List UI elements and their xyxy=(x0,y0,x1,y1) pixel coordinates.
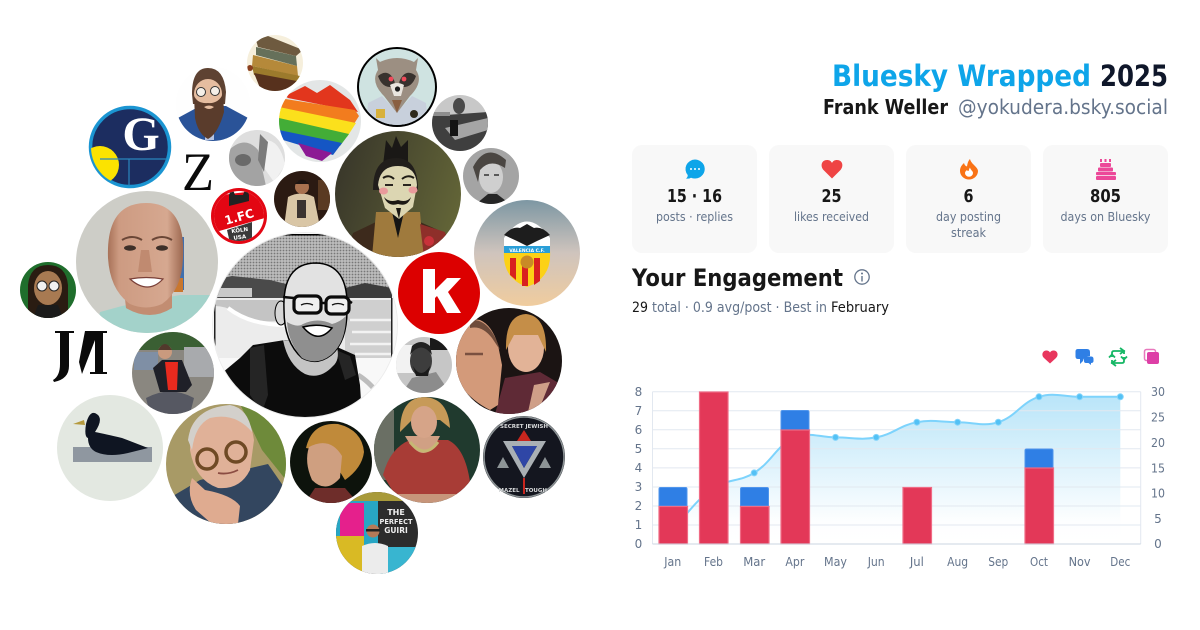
month labels: May xyxy=(824,555,847,569)
month labels: Apr xyxy=(785,555,804,569)
icon: info xyxy=(855,270,869,284)
icon: likes xyxy=(1042,350,1058,364)
icon: cake xyxy=(1096,159,1116,180)
avatar: two men, one clapping xyxy=(456,308,562,414)
left axis labels: 6 xyxy=(635,423,642,437)
avatar: Guardian logo: G xyxy=(122,108,160,161)
icon: reposts xyxy=(1109,348,1127,366)
heading: Your Engagement: Your Engagement xyxy=(631,264,843,292)
left axis labels: 3 xyxy=(635,480,642,494)
icon: heart xyxy=(822,160,842,178)
avatar cluster xyxy=(20,35,580,576)
stat card: likes received: likes received xyxy=(794,210,869,224)
stat card: days on Bluesky: 805 xyxy=(1090,186,1121,207)
icon: quotes xyxy=(1144,350,1159,364)
x axis line xyxy=(652,543,1141,545)
stat card: day posting streak xyxy=(906,145,1031,253)
avatar: Secret Jewish Space Laser Corps patch: SECRET JEWISH xyxy=(500,424,548,430)
month labels: Oct xyxy=(1030,555,1048,569)
avatar: comic-style main portrait xyxy=(212,232,398,418)
avatar: rainbow heart xyxy=(279,80,361,162)
avatar: blond man in suit xyxy=(463,148,519,204)
icon: flame xyxy=(960,159,978,180)
right axis labels: 5 xyxy=(1154,512,1162,526)
avatar: bearded cartoon man xyxy=(176,67,250,141)
bars: likes xyxy=(659,392,1054,544)
engagement summary: total · 0.9 avg/post · Best in xyxy=(652,300,827,316)
line points xyxy=(751,394,1123,476)
month labels: Mar xyxy=(743,555,765,569)
left axis labels xyxy=(635,385,642,551)
stat card: posts and replies: 15 · 16 xyxy=(667,186,722,207)
right axis labels: 25 xyxy=(1151,410,1165,424)
month labels: Feb xyxy=(704,555,723,569)
month labels: Jul xyxy=(909,555,924,569)
avatar: Secret Jewish Space Laser Corps patch xyxy=(483,416,565,498)
month labels: Aug xyxy=(947,555,968,569)
avatar: grayscale cat and woman xyxy=(229,130,285,186)
chart legend xyxy=(1042,348,1159,366)
cumulative line xyxy=(673,395,1120,529)
right axis labels xyxy=(1151,385,1165,551)
left axis labels: 2 xyxy=(635,499,642,513)
stat card: day posting streak: day posting xyxy=(936,210,1001,224)
stat card: day posting streak: 6 xyxy=(964,186,974,207)
left axis labels: 0 xyxy=(635,537,642,551)
avatar: Guy Fawkes mask portrait xyxy=(335,131,461,257)
avatar: grayscale landscape xyxy=(432,95,488,151)
user name and handle xyxy=(823,95,1168,119)
avatar: The Perfect Guiri poster: THE xyxy=(387,508,405,517)
title: Bluesky Wrapped xyxy=(832,59,1091,93)
left axis labels: 5 xyxy=(635,442,642,456)
stat card: posts and replies xyxy=(632,145,757,253)
left axis labels: 1 xyxy=(635,518,642,532)
left axis labels: 8 xyxy=(635,385,642,399)
user name and handle: @yokudera.bsky.social xyxy=(958,95,1168,119)
avatar: raccoon xyxy=(357,47,437,127)
bars: replies xyxy=(659,410,1053,506)
avatar: Secret Jewish Space Laser Corps patch: MAZEL xyxy=(499,488,520,494)
combo chart xyxy=(635,385,1165,569)
avatar: long-haired man xyxy=(290,421,372,503)
avatar: older man with glasses xyxy=(166,404,286,524)
stat card: days on Bluesky xyxy=(1043,145,1168,253)
avatar: JM logo xyxy=(53,331,107,382)
avatar: 1. FC Köln USA: USA xyxy=(233,234,247,242)
avatar: books xyxy=(247,35,303,93)
avatar: Valencia CF crest: VALENCIA C.F. xyxy=(509,248,545,254)
engagement summary: 29 xyxy=(632,300,648,316)
avatar: Z logo: Z xyxy=(182,142,214,202)
stat card: days on Bluesky: days on Bluesky xyxy=(1060,210,1150,224)
avatar: 1. FC Köln USA xyxy=(211,188,267,244)
avatar: k logo xyxy=(398,252,480,334)
stat card: day posting streak: streak xyxy=(951,226,986,240)
icon: speech bubble xyxy=(685,160,705,179)
avatar: smiling bald man xyxy=(76,191,218,333)
month labels: Jun xyxy=(867,555,885,569)
avatar: Guardian logo xyxy=(81,108,170,188)
avatar: cartoon woman with glasses xyxy=(20,262,76,318)
month labels: Nov xyxy=(1069,555,1091,569)
right axis labels: 10 xyxy=(1151,487,1165,501)
month labels: Dec xyxy=(1110,555,1130,569)
stat card: likes received xyxy=(769,145,894,253)
avatar: 1. FC Köln USA: 1.FC xyxy=(223,206,256,228)
avatar: man with beard in suit, grayscale xyxy=(396,337,452,393)
avatar: woman in red top sitting xyxy=(132,332,214,414)
user name and handle: Frank Weller xyxy=(823,95,948,119)
title: 2025 xyxy=(1100,59,1168,93)
right axis labels: 30 xyxy=(1151,385,1165,399)
right axis labels: 20 xyxy=(1151,436,1165,450)
avatar: The Perfect Guiri poster xyxy=(336,492,418,576)
avatar: 1. FC Köln USA: KÖLN xyxy=(231,226,249,235)
avatar: The Perfect Guiri poster: PERFECT xyxy=(380,518,413,526)
left axis labels: 7 xyxy=(635,404,642,418)
grid lines xyxy=(652,392,1141,544)
avatar: The Perfect Guiri poster: GUIRI xyxy=(384,526,408,535)
stat card: likes received: 25 xyxy=(822,186,842,207)
right axis labels: 15 xyxy=(1151,461,1165,475)
month labels xyxy=(663,555,1130,569)
stat card: posts and replies: posts · replies xyxy=(656,210,733,224)
right axis labels: 0 xyxy=(1154,537,1162,551)
icon: replies xyxy=(1076,349,1094,365)
avatar: woman in red dress xyxy=(374,397,480,503)
engagement summary: February xyxy=(831,300,889,316)
avatar: Valencia CF crest xyxy=(474,200,580,306)
month labels: Sep xyxy=(988,555,1008,569)
left axis labels: 4 xyxy=(635,461,642,475)
month labels: Jan xyxy=(663,555,681,569)
cumulative area xyxy=(673,395,1120,544)
avatar: man in beige jacket xyxy=(274,171,330,227)
avatar: duck illustration xyxy=(57,395,163,501)
avatar: Secret Jewish Space Laser Corps patch: TOUGH xyxy=(525,488,547,494)
